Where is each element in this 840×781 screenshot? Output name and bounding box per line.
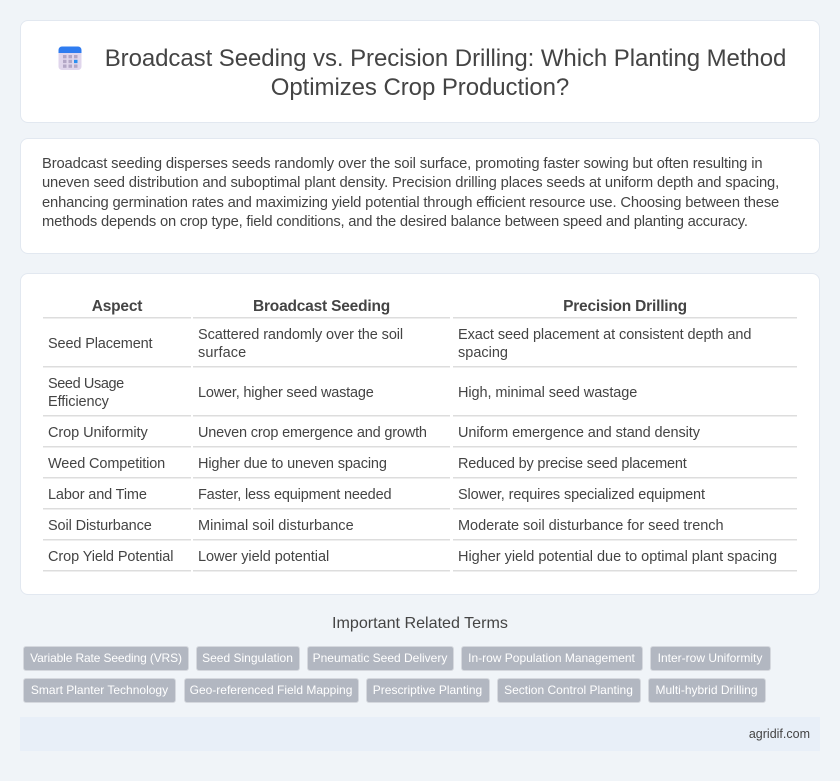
footer bar: [20, 717, 820, 751]
intro text: enhancing germination rates and maximizing yield potential through efficient resource use. Choosing between these: [42, 195, 779, 211]
comparison table: Moderate soil disturbance for seed trench: [458, 518, 724, 534]
related terms tags: Pneumatic Seed Delivery: [313, 651, 447, 665]
comparison table: Faster, less equipment needed: [198, 487, 391, 503]
comparison table: Reduced by precise seed placement: [458, 456, 687, 472]
related terms tags: Variable Rate Seeding (VRS): [30, 651, 182, 665]
comparison table: Efficiency: [48, 394, 109, 410]
intro card: [20, 138, 820, 254]
intro text: methods depends on crop type, field conditions, and the desired balance between speed and planting accuracy.: [42, 214, 748, 230]
header card: [20, 20, 820, 123]
comparison table: Minimal soil disturbance: [198, 518, 354, 534]
icon: calendar: [58, 46, 82, 70]
intro text: Broadcast seeding disperses seeds randomly over the soil surface, promoting faster sowing but often resulting in: [42, 156, 762, 172]
comparison table: Seed Usage: [48, 376, 124, 392]
intro text: [42, 156, 779, 230]
related terms tags: Seed Singulation: [202, 651, 293, 665]
comparison table: Soil Disturbance: [48, 518, 152, 534]
comparison table: Weed Competition: [48, 456, 165, 472]
intro text: uneven seed distribution and suboptimal plant density. Precision drilling places seeds at uniform depth and spacing,: [42, 175, 779, 191]
comparison table: [43, 298, 797, 572]
related terms tags: Geo-referenced Field Mapping: [190, 683, 352, 697]
related terms tags: [23, 646, 771, 703]
footer text: source: agridif.com: [749, 726, 810, 740]
related terms heading: Important Related Terms: [332, 614, 508, 632]
related terms tags: In-row Population Management: [468, 651, 635, 665]
comparison table: surface: [198, 345, 246, 361]
related terms tags: Section Control Planting: [504, 683, 633, 697]
comparison table: Uneven crop emergence and growth: [198, 425, 427, 441]
related terms tags: Inter-row Uniformity: [658, 651, 762, 665]
comparison table: Slower, requires specialized equipment: [458, 487, 705, 503]
comparison table: Scattered randomly over the soil: [198, 327, 403, 343]
comparison table: Exact seed placement at consistent depth and: [458, 327, 751, 343]
title: Broadcast Seeding vs. Precision Drilling: Which Planting Method: [105, 45, 786, 72]
comparison table: Crop Yield Potential: [48, 549, 173, 565]
comparison table: Broadcast Seeding: [253, 298, 390, 315]
comparison table: Higher yield potential due to optimal plant spacing: [458, 549, 777, 565]
title: [105, 45, 786, 101]
comparison table: Labor and Time: [48, 487, 147, 503]
related terms tags: Smart Planter Technology: [31, 683, 168, 697]
comparison table: Higher due to uneven spacing: [198, 456, 387, 472]
comparison table: spacing: [458, 345, 508, 361]
table card: [20, 273, 820, 595]
comparison table: Seed Placement: [48, 336, 152, 352]
comparison table: Lower yield potential: [198, 549, 329, 565]
comparison table: Lower, higher seed wastage: [198, 385, 374, 401]
comparison table: Crop Uniformity: [48, 425, 148, 441]
comparison table: Aspect: [92, 298, 142, 315]
comparison table: High, minimal seed wastage: [458, 385, 637, 401]
comparison table: Precision Drilling: [563, 298, 687, 315]
comparison table: Uniform emergence and stand density: [458, 425, 700, 441]
related terms tags: Prescriptive Planting: [373, 683, 482, 697]
related terms tags: Multi-hybrid Drilling: [655, 683, 758, 697]
title: Optimizes Crop Production?: [271, 74, 569, 101]
